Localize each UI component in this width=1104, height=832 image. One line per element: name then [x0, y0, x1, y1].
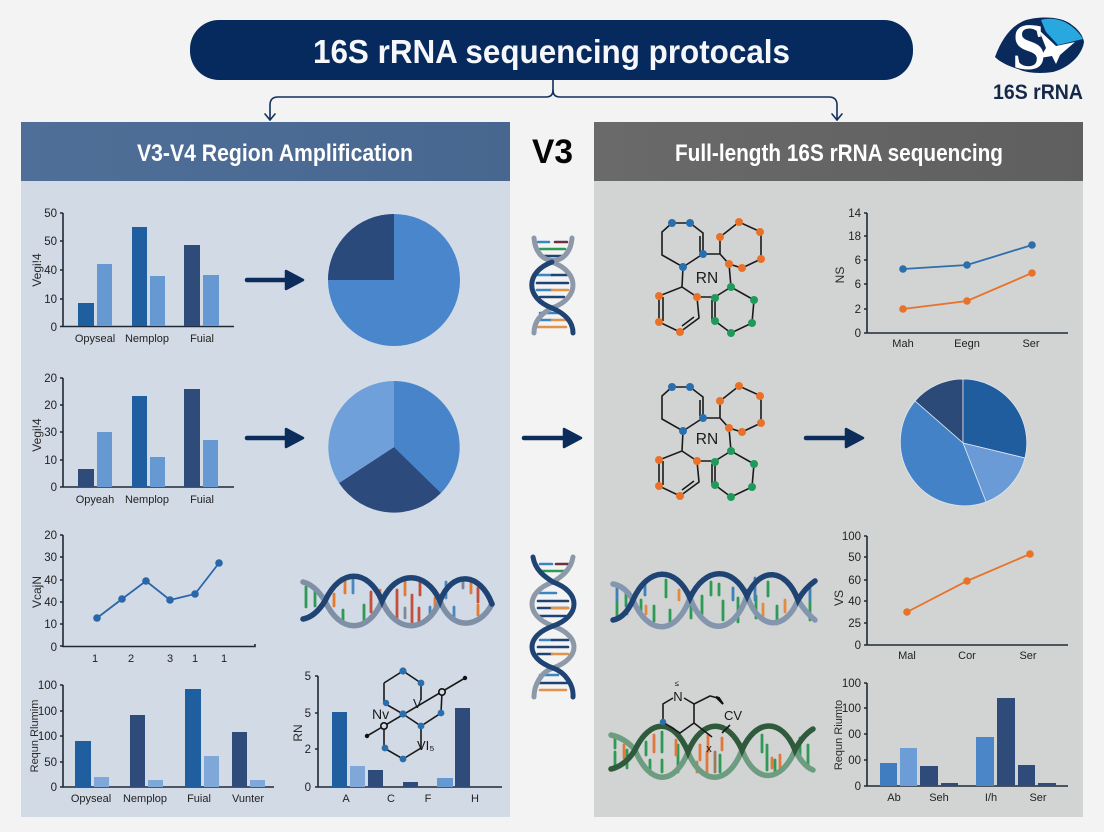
title banner	[190, 20, 913, 80]
bar chart: left row 4: 50	[44, 757, 57, 769]
icon: vertical DNA helix, lower center	[532, 557, 574, 697]
line chart: right row 3: VS	[832, 590, 846, 606]
line chart: left row 3: VcajN	[30, 576, 44, 608]
bar chart: left row 1: Opyseal	[75, 333, 115, 345]
line chart: right row 1: 18	[848, 231, 861, 243]
line chart: right row 1: 6	[855, 255, 861, 267]
pie chart: right row 2	[900, 379, 1027, 506]
line chart: right row 3: 25	[848, 618, 861, 630]
bar chart: left row 2: Fuial	[190, 494, 214, 506]
bar chart: left row 2: Nemplop	[125, 494, 169, 506]
bar chart: left row 4: Nemplop	[123, 793, 167, 805]
bar chart: left row 4	[29, 680, 274, 805]
line chart: left row 3: 10	[44, 619, 57, 631]
line chart: right row 1	[833, 208, 1068, 350]
arrow: row 1 left	[247, 271, 303, 289]
line chart: right row 3: 60	[848, 575, 861, 587]
bar chart with molecule overlay: left row 4: 5	[305, 708, 311, 720]
line chart: right row 3: Cor	[958, 650, 976, 662]
center label V3: V3	[532, 133, 573, 171]
icon: molecule over green DNA, right panel lower: N	[673, 689, 683, 704]
bar chart with molecule overlay: left row 4: 0	[305, 782, 311, 794]
icon: molecule with RN, right row 2: RN	[696, 431, 718, 448]
line chart: right row 3	[832, 531, 1068, 662]
line chart: left row 3: 1	[192, 653, 198, 665]
line chart: right row 3: 40	[848, 596, 861, 608]
icon: molecule over green DNA, right panel lower	[660, 679, 742, 755]
panel: full-length 16S rRNA sequencing: Full-length 16S rRNA sequencing	[675, 140, 1003, 167]
bar chart: right row 4	[833, 678, 1068, 804]
line chart: left row 3: 1	[221, 653, 227, 665]
icon: molecule with RN, right row 1: RN	[696, 270, 718, 287]
line chart: left row 3	[30, 530, 255, 665]
bar chart: right row 4: 0	[855, 781, 861, 793]
bar chart: right row 4: I/h	[985, 792, 997, 804]
bar chart with molecule overlay: left row 4: 2	[305, 744, 311, 756]
bar chart with molecule overlay: left row 4: Nv	[372, 706, 389, 722]
panel: full-length 16S rRNA sequencing	[594, 122, 1083, 817]
pie chart: left row 2	[328, 381, 460, 513]
line chart: right row 3: 0	[855, 640, 861, 652]
icon: horizontal DNA helix, right panel upper	[613, 574, 815, 627]
bar chart with molecule overlay: left row 4: RN	[291, 724, 305, 742]
line chart: right row 3: Ser	[1019, 650, 1037, 662]
line chart: right row 3: 50	[848, 552, 861, 564]
bar chart: left row 1: Fuial	[190, 333, 214, 345]
panel: V3-V4 region amplification	[21, 122, 510, 817]
logo: 16S rRNA: S	[1012, 11, 1046, 84]
line chart: right row 1: 6	[855, 279, 861, 291]
connector arrows from title to panels	[265, 80, 842, 120]
bar chart with molecule overlay: left row 4: V	[413, 696, 422, 711]
bar chart: left row 2: 10	[44, 455, 57, 467]
bar chart: right row 4: 00	[848, 729, 861, 741]
line chart: left row 3: 30	[44, 552, 57, 564]
bar chart with molecule overlay: left row 4: VI₅	[417, 738, 435, 753]
bar chart: right row 4: 100	[842, 703, 861, 715]
bar chart: right row 4: Seh	[929, 792, 949, 804]
bar chart with molecule overlay: left row 4: 5	[305, 671, 311, 683]
bar chart with molecule overlay: left row 4: F	[425, 793, 432, 805]
bar chart: left row 4: Requn Rlumim	[29, 700, 41, 772]
bar chart with molecule overlay: left row 4: H	[471, 793, 479, 805]
bar chart: left row 2: 30	[44, 427, 57, 439]
bar chart: left row 1: 40	[44, 265, 57, 277]
bar chart: left row 1: 50	[44, 236, 57, 248]
bar chart: left row 2: Vegi!4	[30, 418, 44, 452]
bar chart: left row 4: 100	[38, 706, 57, 718]
bar chart: right row 4: Requn Riumto	[833, 700, 845, 770]
line chart: left row 3: 3	[167, 653, 173, 665]
pie chart: left row 1	[328, 214, 460, 346]
line chart: left row 3: 1	[92, 653, 98, 665]
line chart: right row 1: 2	[855, 304, 861, 316]
line chart: right row 1: Eegn	[954, 338, 980, 350]
icon: horizontal DNA helix, left panel	[303, 576, 492, 626]
bar chart: left row 1: 50	[44, 208, 57, 220]
bar chart: left row 4: Fuial	[187, 793, 211, 805]
bar chart with molecule overlay: left row 4: C	[387, 793, 395, 805]
icon: green DNA helix, right panel lower	[611, 726, 813, 777]
bar chart: right row 4: Ser	[1029, 792, 1047, 804]
icon: molecule over green DNA, right panel lower: ≤	[675, 679, 680, 688]
bar chart: left row 4: Opyseal	[71, 793, 111, 805]
icon: vertical DNA helix, upper center	[532, 238, 573, 333]
line chart: right row 3: Mal	[898, 650, 916, 662]
line chart: left row 3: 0	[51, 642, 57, 654]
line chart: right row 1: NS	[833, 267, 847, 283]
bar chart: left row 2: 20	[44, 373, 57, 385]
bar chart: left row 2: 0	[51, 482, 57, 494]
bar chart: left row 1: 0	[51, 322, 57, 334]
bar chart: right row 4: 00	[848, 755, 861, 767]
bar chart: left row 1	[30, 208, 234, 345]
line chart: left row 3: 40	[44, 597, 57, 609]
bar chart: left row 2: Opyeah	[76, 494, 114, 506]
line chart: right row 3: 100	[842, 531, 861, 543]
icon: molecule with RN, right row 2	[655, 382, 765, 501]
line chart: right row 1: Mah	[892, 338, 914, 350]
bar chart: left row 1: Nemplop	[125, 333, 169, 345]
line chart: left row 3: 2	[128, 653, 134, 665]
line chart: left row 3: 20	[44, 530, 57, 542]
bar chart: left row 2	[30, 373, 234, 506]
bar chart with molecule overlay: left row 4	[291, 667, 502, 805]
arrow: row 2 right	[806, 429, 863, 447]
arrow: center	[524, 429, 581, 447]
arrow: row 2 left	[247, 429, 303, 447]
logo: 16S rRNA	[993, 11, 1084, 104]
bar chart: left row 4: 100	[38, 731, 57, 743]
panel: V3-V4 region amplification: V3-V4 Region Amplification	[137, 140, 413, 167]
bar chart: left row 4: Vunter	[232, 793, 264, 805]
bar chart: left row 1: 10	[44, 294, 57, 306]
icon: molecule over green DNA, right panel lower: CV	[724, 708, 742, 723]
bar chart: right row 4: 100	[842, 678, 861, 690]
bar chart: left row 4: 0	[51, 782, 57, 794]
line chart: right row 1: 14	[848, 208, 862, 220]
line chart: left row 3: 40	[44, 575, 57, 587]
icon: molecule over green DNA, right panel lower: x	[706, 743, 712, 755]
line chart: right row 1: Ser	[1022, 338, 1040, 350]
line chart: right row 1: 0	[855, 328, 861, 340]
title banner: 16S rRNA sequencing protocals	[313, 33, 790, 70]
icon: molecule with RN, right row 1	[655, 218, 765, 337]
bar chart: left row 4: 100	[38, 680, 57, 692]
bar chart: left row 2: 20	[44, 400, 57, 412]
bar chart: right row 4: Ab	[887, 792, 901, 804]
bar chart: left row 1: Vegi!4	[30, 253, 44, 287]
logo: 16S rRNA: 16S rRNA	[993, 80, 1083, 104]
bar chart with molecule overlay: left row 4: A	[342, 793, 350, 805]
